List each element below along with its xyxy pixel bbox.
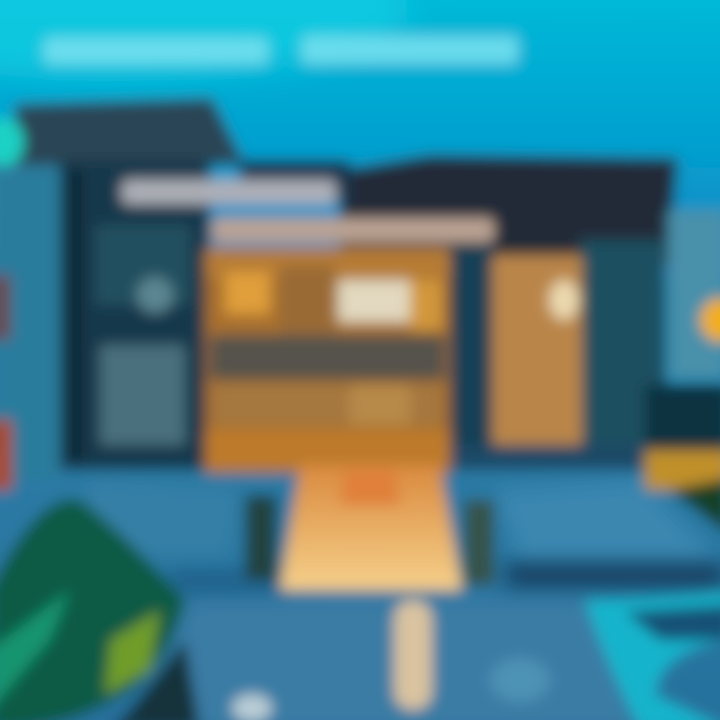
turquoise pool lower right: [490, 592, 720, 720]
central wooden facade: [205, 248, 450, 473]
orange light at right edge: [700, 298, 720, 342]
lit shrub at right: [645, 450, 720, 535]
dark hedges beside entrance: [245, 495, 494, 585]
subtitle (illegible in reference, rendered as blurred bars): [122, 180, 494, 242]
green plants lower left: [0, 499, 200, 720]
plaza ground: [0, 450, 720, 720]
sky background: [0, 0, 720, 280]
building left section: [0, 98, 245, 490]
glowing entrance path: [232, 465, 462, 720]
title (illegible in reference, rendered as blurred bars): [44, 36, 518, 64]
building right dark roof and walls: [240, 155, 720, 470]
right wooden panel: [492, 255, 582, 445]
